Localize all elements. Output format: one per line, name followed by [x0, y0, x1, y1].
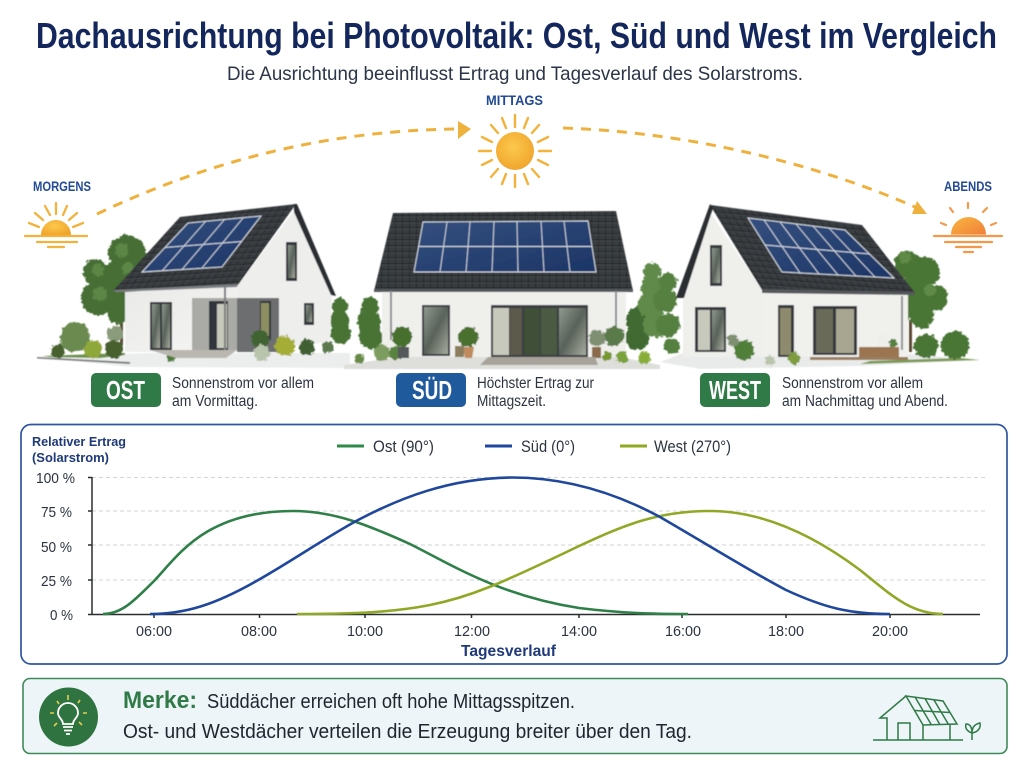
- legend: Ost (90°): [373, 438, 434, 456]
- label: Mittags: MITTAGS: [486, 92, 543, 108]
- x axis labels: 12:00: [454, 624, 490, 640]
- x axis labels: 16:00: [665, 624, 701, 640]
- panel: Merke callout: [23, 678, 1007, 754]
- subtitle: Die Ausrichtung beeinflusst Ertrag und Tagesverlauf des Solarstroms.: [227, 63, 803, 85]
- y axis labels: 50 %: [41, 539, 72, 556]
- tag: OST: OST: [106, 375, 145, 405]
- icon: light bulb: [39, 688, 98, 746]
- tag: OST: [91, 373, 161, 407]
- tag: WEST: [700, 373, 770, 407]
- x axis labels: 06:00: [136, 624, 172, 640]
- icon: house with solar roof: [873, 696, 980, 740]
- text: Merke heading: Merke:: [123, 687, 197, 714]
- west house roof: [710, 205, 915, 293]
- arrow: morning to midday: [97, 121, 471, 214]
- panel: line chart: [21, 424, 1007, 664]
- curve: Ost: [103, 511, 688, 614]
- x axis title: Tagesverlauf: [461, 643, 557, 660]
- text: WEST description: [782, 375, 948, 410]
- curve: West: [297, 511, 943, 614]
- text: WEST description: am Nachmittag und Abend.: [782, 393, 948, 410]
- text: OST description: [172, 375, 314, 410]
- tag: SÜD: SÜD: [412, 375, 452, 405]
- legend: [337, 438, 731, 456]
- axis title: relative yield: Relativer Ertrag: [32, 435, 126, 449]
- west house walls: [683, 212, 762, 357]
- y axis labels: 100 %: [36, 470, 75, 487]
- y axis labels: 75 %: [41, 504, 72, 521]
- legend: West (270°): [654, 438, 731, 456]
- y axis labels: 25 %: [41, 573, 72, 590]
- text: WEST description: Sonnenstrom vor allem: [782, 375, 923, 392]
- icon: evening sun: [934, 203, 1002, 252]
- legend: Süd (0°): [521, 438, 575, 456]
- tag: SÜD: [396, 373, 466, 407]
- x axis labels: 08:00: [241, 624, 277, 640]
- text: OST description: am Vormittag.: [172, 393, 258, 410]
- icon: morning sun: [25, 203, 87, 247]
- text: Merke line 1: Süddächer erreichen oft hohe Mittagsspitzen.: [207, 690, 575, 713]
- tag: WEST: WEST: [709, 375, 761, 405]
- illustration: east house: [37, 204, 351, 368]
- y axis labels: [36, 470, 75, 624]
- text: Merke line 2: Ost- und Westdächer verteilen die Erzeugung breiter über den Tag.: [123, 720, 692, 743]
- x axis labels: 18:00: [768, 624, 804, 640]
- curve: Süd: [150, 478, 890, 614]
- axis title: relative yield: (Solarstrom): [32, 451, 109, 465]
- east house solar panels: [142, 216, 261, 272]
- south house walls: [382, 290, 626, 357]
- y axis labels: 0 %: [50, 607, 73, 624]
- illustration: west house: [653, 204, 980, 369]
- x axis labels: 20:00: [872, 624, 908, 640]
- chart axes: [88, 477, 980, 618]
- east house roof: [113, 204, 296, 291]
- x axis labels: [136, 624, 908, 640]
- text: SÜD description: Höchster Ertrag zur: [477, 375, 594, 392]
- text: SÜD description: [477, 375, 594, 410]
- x axis labels: 14:00: [561, 624, 597, 640]
- south house solar panels: [414, 221, 596, 272]
- text: OST description: Sonnenstrom vor allem: [172, 375, 314, 392]
- label: Morgens: MORGENS: [33, 178, 91, 194]
- east house walls: [125, 285, 238, 352]
- south house roof: [374, 211, 633, 291]
- axis title: relative yield: [32, 435, 126, 465]
- x axis labels: 10:00: [347, 624, 383, 640]
- arrow: midday to evening: [563, 128, 927, 214]
- icon: midday sun: [479, 115, 551, 187]
- text: SÜD description: Mittagszeit.: [477, 393, 546, 410]
- west house solar panels: [748, 218, 894, 278]
- illustration: south house: [344, 211, 667, 369]
- label: Abends: ABENDS: [944, 178, 992, 194]
